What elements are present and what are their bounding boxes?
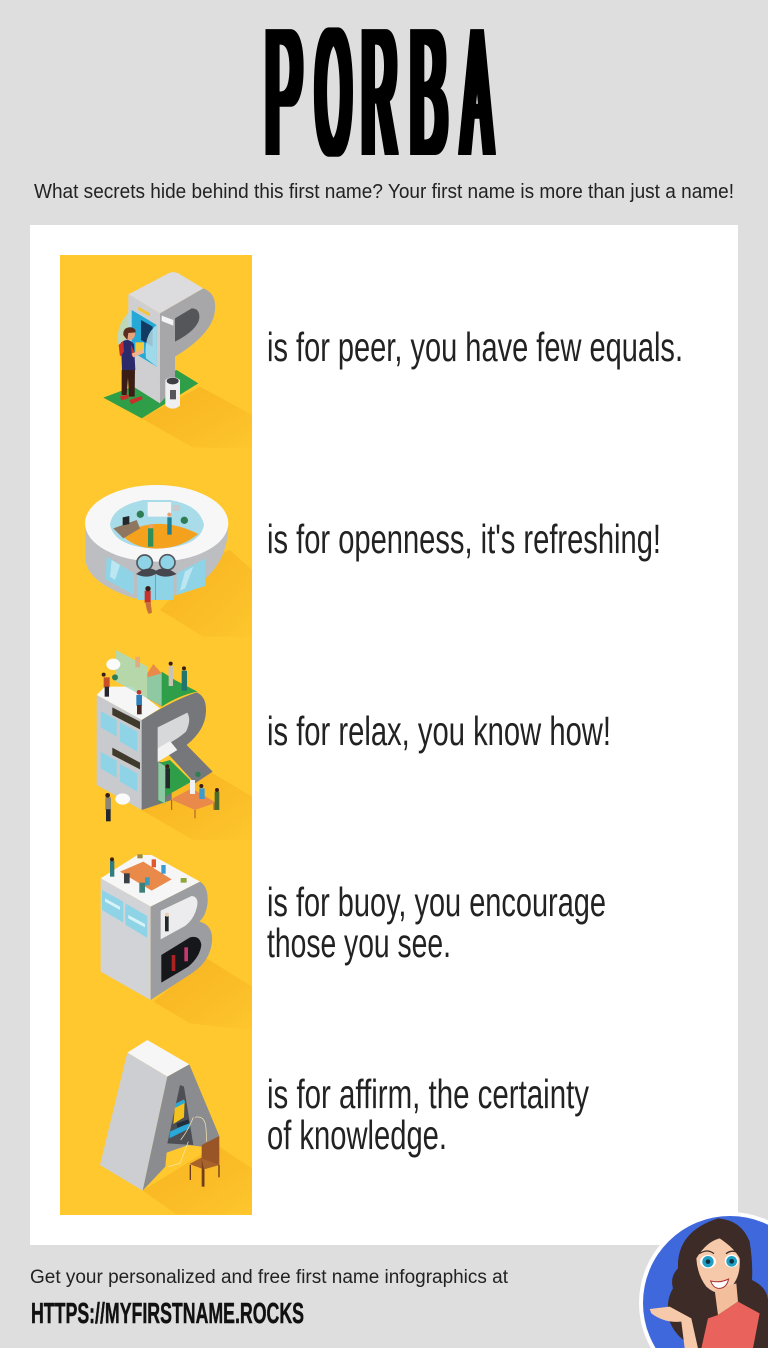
icon: letter R as an office building <box>97 650 252 840</box>
footer text: Get your personalized and free first name infographics at <box>30 1267 509 1288</box>
text: B line: those you see. <box>267 920 451 966</box>
text: B line <box>267 879 606 966</box>
icon: letter O as an optician shop <box>85 485 252 637</box>
text: A line: of knowledge. <box>267 1112 447 1158</box>
text: A line: is for affirm, the certainty <box>267 1071 589 1117</box>
title <box>266 0 492 193</box>
footer link: HTTPS://MYFIRSTNAME.ROCKS <box>31 1298 304 1330</box>
icon: letter A as a workspace <box>100 1040 252 1214</box>
panel: yellow illustration column <box>60 255 252 1215</box>
panel: white card <box>30 225 738 1245</box>
icon: letter B as a meeting-room building <box>101 854 252 1030</box>
text: B line: is for buoy, you encourage <box>267 879 606 925</box>
subtitle: What secrets hide behind this first name? Your first name is more than just a name! <box>34 181 734 203</box>
text: A line <box>267 1071 589 1158</box>
text: R line: is for relax, you know how! <box>267 708 611 754</box>
avatar: woman in a blue circle <box>639 1212 768 1348</box>
icon: letter P as an ATM machine <box>103 272 252 448</box>
